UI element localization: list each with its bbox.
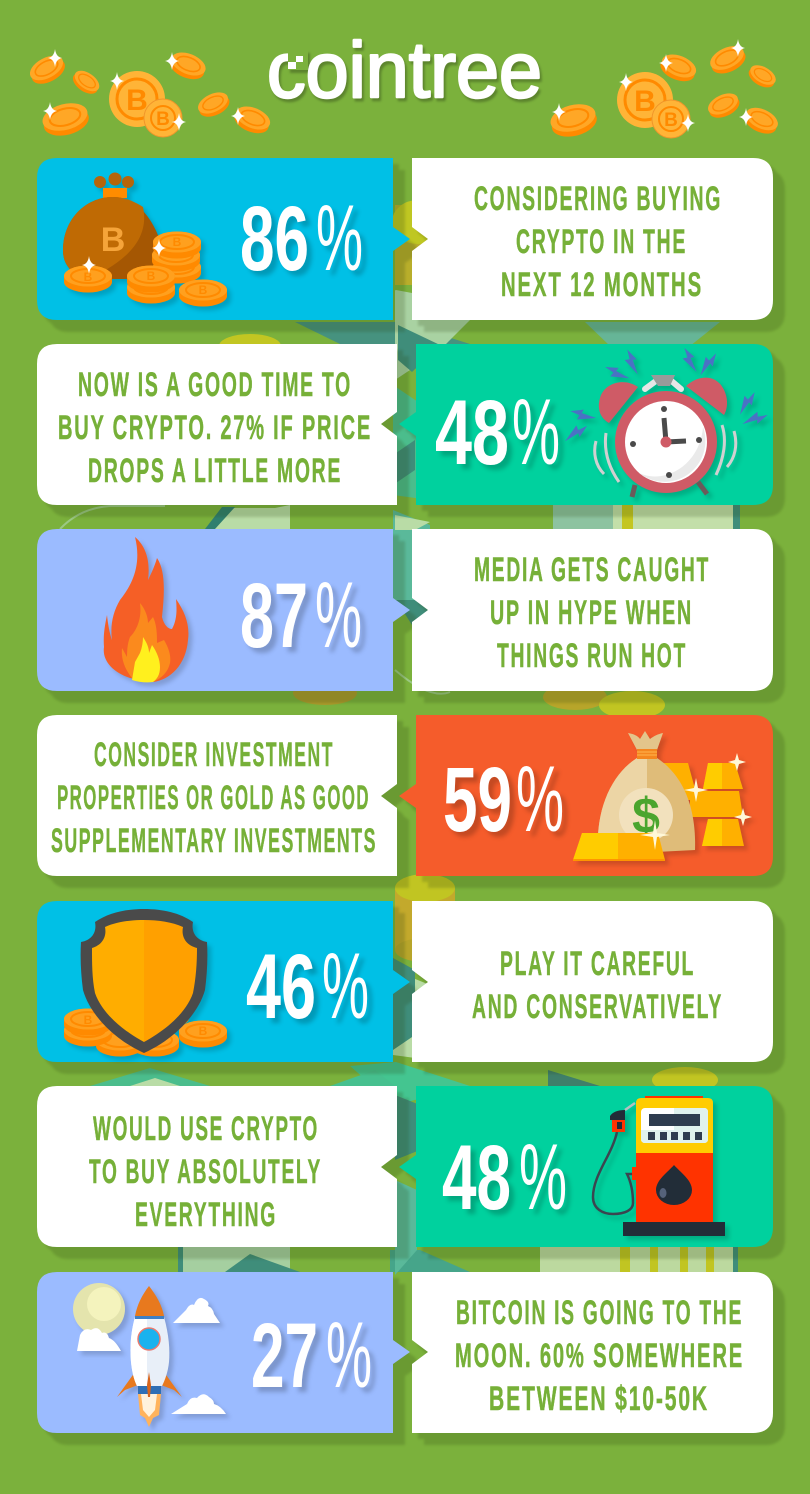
text: investment properties or gold: SUPPLEMENTARY INVESTMENTS bbox=[51, 822, 377, 860]
text: media hype bbox=[474, 551, 710, 675]
text: now is a good time: BUY CRYPTO. 27% IF PRICE bbox=[58, 409, 372, 447]
text: play it careful bbox=[472, 945, 723, 1026]
icon: money bag and gold bars: $ bbox=[632, 788, 660, 844]
panel: row 3 media hype bbox=[37, 529, 785, 703]
text: investment properties or gold bbox=[51, 736, 377, 860]
icon: rocket, moon and clouds bbox=[73, 1283, 226, 1427]
stat: 48%: % bbox=[519, 1124, 567, 1229]
stat: 46%: % bbox=[322, 933, 369, 1038]
logo: cointree: cointree bbox=[267, 25, 542, 114]
text: considering buying crypto bbox=[474, 180, 722, 304]
header coins right: B bbox=[634, 85, 656, 118]
icon: money bag and gold bars bbox=[573, 731, 752, 861]
stat: 87%: 87 bbox=[240, 565, 308, 667]
text: considering buying crypto: CRYPTO IN THE bbox=[516, 223, 687, 261]
icon: bitcoin money bag and coins bbox=[63, 172, 227, 306]
text: would use crypto: TO BUY ABSOLUTELY bbox=[89, 1153, 322, 1191]
text: bitcoin to the moon bbox=[455, 1294, 744, 1418]
text: now is a good time: NOW IS A GOOD TIME TO bbox=[78, 366, 352, 404]
panel: row 7 going to the moon bbox=[37, 1272, 785, 1445]
panel: row 4 supplementary investments bbox=[37, 715, 785, 888]
icon: bitcoin money bag and coins: B bbox=[199, 283, 208, 297]
panel: row 5 careful and conservative bbox=[37, 901, 785, 1074]
stat: 86%: % bbox=[316, 185, 363, 290]
isometric background illustration bbox=[60, 200, 740, 1275]
icon: alarm clock bbox=[561, 346, 768, 497]
text: now is a good time: DROPS A LITTLE MORE bbox=[88, 452, 342, 490]
text: investment properties or gold: PROPERTIES OR GOLD AS GOOD bbox=[57, 779, 370, 817]
stat: 46%: 46 bbox=[246, 936, 316, 1038]
stat: 48%: 48 bbox=[435, 382, 509, 484]
icon: bitcoin money bag and coins: B bbox=[84, 270, 93, 284]
icon: shield and coins bbox=[64, 909, 227, 1056]
icon: bitcoin money bag and coins: B bbox=[147, 269, 156, 283]
panel: row 6 use crypto to buy everything bbox=[37, 1086, 785, 1259]
panel: row 2 good time to buy bbox=[37, 344, 785, 517]
text: would use crypto: WOULD USE CRYPTO bbox=[93, 1110, 319, 1148]
header coins left: B bbox=[126, 84, 148, 117]
stat: 86%: 86 bbox=[240, 188, 309, 290]
header coins left bbox=[26, 48, 273, 140]
icon: bitcoin money bag and coins: B bbox=[173, 235, 182, 249]
stat: 27%: % bbox=[326, 1302, 372, 1407]
stat: 48%: % bbox=[512, 379, 560, 484]
header coins right: B bbox=[664, 110, 678, 131]
panel: row 1 considering buying bbox=[37, 158, 785, 332]
stat: 87%: % bbox=[315, 562, 362, 667]
stat: 48%: 48 bbox=[442, 1127, 511, 1229]
text: now is a good time bbox=[58, 366, 372, 490]
stat: 59%: % bbox=[516, 746, 564, 851]
icon: flame bbox=[104, 537, 188, 682]
icon: bitcoin money bag and coins: B bbox=[101, 221, 125, 259]
icon: shield and coins: B bbox=[199, 1024, 208, 1038]
text: would use crypto: EVERYTHING bbox=[135, 1196, 277, 1234]
text: would use crypto bbox=[89, 1110, 322, 1234]
stat: 27%: 27 bbox=[251, 1305, 318, 1407]
text: investment properties or gold: CONSIDER INVESTMENT bbox=[94, 736, 334, 774]
header coins right bbox=[547, 39, 781, 141]
header coins left: B bbox=[156, 109, 170, 130]
stat: 59%: 59 bbox=[443, 749, 512, 851]
icon: fuel pump bbox=[593, 1096, 725, 1236]
icon: shield and coins: B bbox=[84, 1013, 93, 1027]
